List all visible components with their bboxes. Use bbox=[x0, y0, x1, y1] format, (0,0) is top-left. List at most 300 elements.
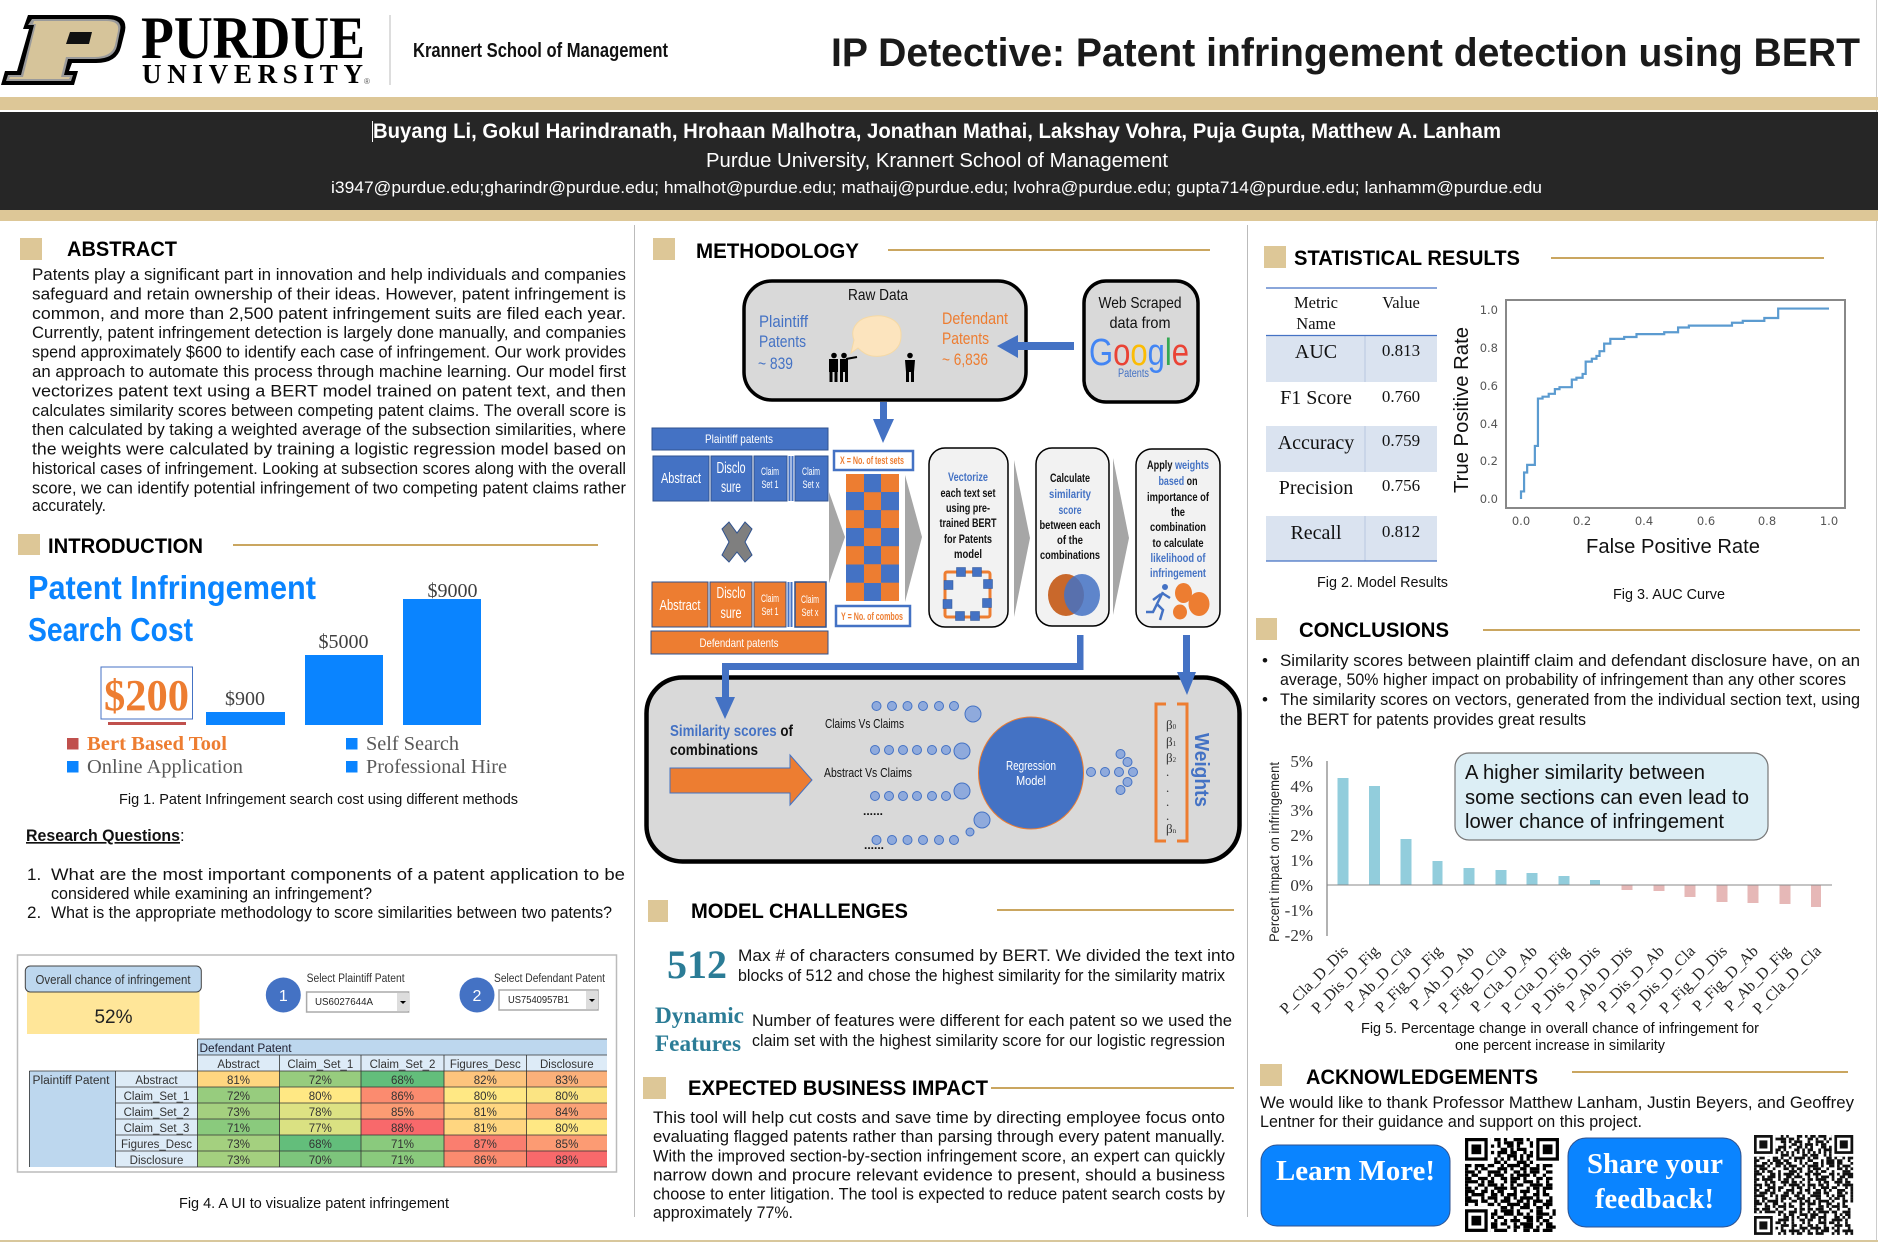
icon: QR code 1 bbox=[1465, 1138, 1559, 1232]
arrow: raw data down bbox=[873, 402, 894, 443]
heat map table: Figures_Desc bbox=[450, 1059, 521, 1071]
header: school name: Krannert School of Management bbox=[413, 40, 668, 62]
chart: patent infringement search cost: $5000 bbox=[318, 631, 368, 653]
arrow: similarity re-entry bbox=[715, 672, 735, 719]
output dots bbox=[1086, 750, 1138, 794]
button: learn more bbox=[1261, 1145, 1450, 1226]
heat map table bbox=[29, 1039, 607, 1167]
raw data box: Patents bbox=[759, 332, 806, 351]
panel: model challenges: Max # of characters consumed by BERT. We divided the text into bbox=[738, 946, 1235, 965]
arrow: similarity to combinations bbox=[715, 635, 1084, 719]
heat map table: Claim_Set_1 bbox=[124, 1091, 189, 1103]
raw data box: Defendant bbox=[942, 309, 1008, 328]
chart: percent impact bars: P_Dis_D_Ab bbox=[1595, 943, 1668, 1016]
regression model: Model bbox=[1016, 773, 1046, 788]
step: vectorize: Vectorize bbox=[948, 470, 988, 484]
caption: fig 4: Fig 4. A UI to visualize patent infringement bbox=[179, 1196, 449, 1212]
weights vector: β0 bbox=[1166, 717, 1177, 732]
chart: percent impact bars bbox=[1266, 752, 1832, 1018]
chart: percent impact bars: 3% bbox=[1290, 801, 1313, 820]
heat map table: Claim_Set_2 bbox=[370, 1059, 435, 1071]
icon: QR code 2 bbox=[1754, 1135, 1853, 1235]
heat map table: 80% bbox=[309, 1091, 332, 1103]
heat map table: 80% bbox=[555, 1123, 578, 1135]
header: Purdue logo: UNIVERSITY bbox=[142, 59, 363, 89]
panel: conclusions: average, 50% higher impact on probability of infringement than any other scores bbox=[1280, 670, 1846, 689]
chart legend: Online Application bbox=[87, 756, 243, 778]
Y label bbox=[836, 606, 910, 626]
plaintiff patents blocks: Claim bbox=[761, 466, 779, 478]
chart: percent impact bars: 0% bbox=[1290, 876, 1313, 895]
header: Purdue logo: ® bbox=[364, 77, 370, 86]
chart: percent impact bars: P_Fig_D_Cla bbox=[1436, 943, 1510, 1017]
panel: expected business impact: choose to enter litigation. The tool is expected to reduce patent search costs by bbox=[653, 1184, 1225, 1204]
defendant patents blocks: Abstract bbox=[660, 597, 701, 614]
panel: model challenges: MODEL CHALLENGES bbox=[691, 900, 908, 923]
button: share your feedback bbox=[1568, 1138, 1741, 1227]
panel: abstract: ABSTRACT bbox=[67, 238, 177, 261]
chart: percent impact bars: P_Fig_D_Dis bbox=[1657, 943, 1731, 1017]
weights vector: βn bbox=[1166, 821, 1177, 836]
heading: methodology: METHODOLOGY bbox=[696, 240, 859, 263]
chart: AUC curve: 0.0 bbox=[1480, 492, 1498, 506]
heat map table: 85% bbox=[555, 1139, 578, 1151]
heat map table: Claim_Set_1 bbox=[287, 1059, 353, 1071]
raw data box: Raw Data bbox=[848, 287, 908, 304]
icon: cross bbox=[722, 522, 752, 562]
chart: percent impact bars: P_Ab_D_Dis bbox=[1563, 943, 1636, 1016]
chart: AUC curve: 1.0 bbox=[1820, 514, 1838, 528]
heat map table: 78% bbox=[309, 1107, 332, 1119]
research questions: : bbox=[180, 827, 185, 845]
research questions: Research Questions bbox=[26, 827, 180, 845]
icon: Google wordmark: Google bbox=[1089, 332, 1189, 374]
step: similarity: combinations bbox=[1040, 548, 1100, 562]
panel: conclusions: The similarity scores on vectors, generated from the individual section text, using bbox=[1280, 690, 1860, 709]
research questions bbox=[26, 827, 625, 922]
step: similarity: Calculate bbox=[1050, 471, 1090, 485]
panel: model challenges: claim set with the highest similarity score for our logistic regression bbox=[752, 1031, 1225, 1050]
chart: percent impact bars: P_Dis_D_Cla bbox=[1624, 943, 1699, 1018]
panel: acknowledgements: We would like to thank Professor Matthew Lanham, Justin Beyers, and Geoffrey bbox=[1260, 1093, 1854, 1112]
heat map table: 88% bbox=[555, 1155, 578, 1167]
raw data box bbox=[744, 281, 1026, 400]
heat map table: 80% bbox=[555, 1091, 578, 1103]
step: weights: importance of bbox=[1147, 490, 1210, 504]
banner: authors: i3947@purdue.edu;gharindr@purdue.edu; hmalhot@purdue.edu; mathaij@purdue.edu; lvohra@purdue.edu; gupta714@purdue.edu; lanhamm@purdue.edu bbox=[331, 178, 1542, 197]
heat map table: 73% bbox=[227, 1107, 250, 1119]
heat map table: Claim_Set_2 bbox=[124, 1107, 189, 1119]
panel: introduction: INTRODUCTION bbox=[48, 535, 203, 558]
banner: authors: Purdue University, Krannert School of Management bbox=[706, 150, 1168, 172]
chart: percent impact bars: P_Cla_D_Fig bbox=[1499, 943, 1573, 1017]
caption: fig 5: one percent increase in similarity bbox=[1455, 1038, 1666, 1054]
step: weights: infringement bbox=[1150, 566, 1206, 580]
icon: speech bubble and people bbox=[829, 316, 915, 382]
neural network dots: ...... bbox=[863, 804, 883, 818]
plaintiff patents blocks: Claim bbox=[802, 466, 820, 478]
panel: conclusions: the BERT for patents provides great results bbox=[1280, 710, 1586, 729]
chart: AUC curve: 0.2 bbox=[1573, 514, 1591, 528]
research questions: What are the most important components of a patent application to be bbox=[51, 865, 625, 884]
regression panel: combinations bbox=[670, 742, 758, 759]
panel: model challenges: Dynamic bbox=[655, 1003, 744, 1028]
abstract text: score, we can identify potential infringement of two competing patent claims rather bbox=[32, 478, 626, 497]
combination checkerboard bbox=[846, 474, 899, 601]
title: IP Detective: Patent infringement detection using BERT bbox=[831, 31, 1860, 75]
overall chance box: Overall chance of infringement bbox=[36, 972, 191, 987]
table: model results: 0.813 bbox=[1382, 341, 1420, 360]
defendant patents blocks: Defendant patents bbox=[700, 636, 778, 650]
chart: AUC curve: 0.4 bbox=[1480, 417, 1498, 431]
abstract text: safeguard and retain ownership of their ideas. However, patent infringement is bbox=[32, 284, 626, 303]
step: vectorize: model bbox=[954, 547, 982, 561]
heat map table: 70% bbox=[309, 1155, 332, 1167]
table: model results: Accuracy bbox=[1278, 432, 1354, 454]
panel: model challenges: Number of features were different for each patent so we used the bbox=[752, 1011, 1232, 1030]
panel: conclusions: • bbox=[1262, 690, 1268, 709]
heat map table: 68% bbox=[309, 1139, 332, 1151]
heat map table: 84% bbox=[555, 1107, 578, 1119]
heat map table: Claim_Set_3 bbox=[124, 1123, 189, 1135]
abstract text: vectorizes patent text using a BERT model trained on patent text, and then bbox=[32, 381, 626, 400]
plaintiff patents blocks: Set x bbox=[802, 479, 820, 491]
banner: authors bbox=[0, 97, 1878, 221]
chart: percent impact bars: P_Cla_D_Cla bbox=[1750, 943, 1825, 1018]
chart: percent impact bars: -1% bbox=[1285, 901, 1313, 920]
arrows: gray chevrons bbox=[829, 458, 1129, 617]
heat map table: 71% bbox=[227, 1123, 250, 1135]
chart: percent impact bars: P_Dis_D_Fig bbox=[1309, 943, 1383, 1017]
heading: statistical results: STATISTICAL RESULTS bbox=[1294, 247, 1520, 270]
chart: percent impact bars: 4% bbox=[1290, 777, 1313, 796]
panel: model challenges: Features bbox=[655, 1031, 741, 1056]
panel: model challenges: 512 bbox=[667, 942, 727, 987]
panel: expected business impact: This tool will help cut costs and save time by directing employee focus onto bbox=[653, 1108, 1225, 1127]
web scraped box: data from bbox=[1110, 315, 1170, 332]
arrow: weights down bbox=[1177, 635, 1196, 695]
chart: percent impact bars: 1% bbox=[1290, 851, 1313, 870]
heat map table: 81% bbox=[474, 1107, 497, 1119]
raw data box: ~ 6,836 bbox=[942, 350, 988, 369]
heat map table: 73% bbox=[227, 1155, 250, 1167]
chart: patent infringement search cost: $900 bbox=[225, 688, 265, 710]
panel: conclusions bbox=[1256, 618, 1860, 729]
plaintiff selector: US6027644A bbox=[315, 996, 373, 1008]
chart: percent impact bars: -2% bbox=[1285, 926, 1313, 945]
weights vector: . bbox=[1166, 808, 1169, 823]
defendant patents blocks bbox=[651, 582, 828, 654]
chart: percent impact bars: P_Ab_D_Fig bbox=[1721, 943, 1794, 1015]
table: model results bbox=[1266, 288, 1437, 561]
caption: fig 1: Fig 1. Patent Infringement search cost using different methods bbox=[119, 792, 518, 808]
neural network dots: ...... bbox=[864, 838, 884, 852]
step: weights: combination bbox=[1150, 520, 1206, 534]
panel: acknowledgements: ACKNOWLEDGEMENTS bbox=[1306, 1066, 1538, 1089]
heat map table: 86% bbox=[391, 1091, 414, 1103]
raw data box: ~ 839 bbox=[758, 354, 793, 373]
heat map table: 72% bbox=[309, 1075, 332, 1087]
panel: expected business impact: approximately 77%. bbox=[653, 1203, 793, 1222]
heat map table: Disclosure bbox=[540, 1059, 594, 1071]
heat map table: 71% bbox=[391, 1139, 414, 1151]
heat map table: 85% bbox=[391, 1107, 414, 1119]
chart: percent impact bars: P_Dis_D_Dis bbox=[1529, 943, 1604, 1018]
panel: expected business impact: evaluating flagged patents rather than parsing through every patent manually. bbox=[653, 1127, 1225, 1146]
weights vector bbox=[1156, 704, 1212, 841]
plaintiff patents blocks: sure bbox=[721, 479, 741, 496]
heat map table: 80% bbox=[474, 1091, 497, 1103]
regression panel: Similarity scores of bbox=[670, 723, 794, 740]
chart: AUC curve bbox=[1451, 300, 1845, 558]
neural network dots bbox=[863, 702, 990, 852]
X label: X = No. of test sets bbox=[840, 455, 904, 467]
heat map table: 71% bbox=[391, 1155, 414, 1167]
panel: introduction bbox=[18, 534, 625, 922]
diagram: methodology flow bbox=[646, 281, 1240, 862]
chart: percent impact bars: P_Fig_D_Fig bbox=[1372, 943, 1446, 1016]
heading: methodology bbox=[653, 238, 1210, 263]
plaintiff selector: 1 bbox=[279, 988, 288, 1005]
X label bbox=[834, 451, 913, 470]
overall chance box: 52% bbox=[94, 1007, 133, 1028]
panel: expected business impact bbox=[643, 1077, 1234, 1222]
table: model results: 0.760 bbox=[1382, 387, 1420, 406]
weights vector: . bbox=[1166, 780, 1169, 795]
weights vector: β1 bbox=[1166, 734, 1177, 749]
defendant patents blocks: Set x bbox=[802, 607, 819, 619]
panel: abstract bbox=[20, 238, 626, 515]
banner: authors: Buyang Li, Gokul Harindranath, Hrohaan Malhotra, Jonathan Mathai, Lakshay Vohra, Puja Gupta, Matthew A. Lanham bbox=[373, 120, 1501, 143]
chart legend: Professional Hire bbox=[366, 756, 507, 778]
weights vector: Weights bbox=[1190, 733, 1212, 807]
callout: higher similarity bbox=[1455, 753, 1768, 840]
table: model results: Recall bbox=[1290, 522, 1342, 544]
step: weights: the bbox=[1171, 505, 1185, 519]
chart: percent impact bars: P_Ab_D_Cla bbox=[1342, 943, 1415, 1016]
plaintiff patents blocks: Set 1 bbox=[762, 479, 778, 491]
chart legend: Self Search bbox=[366, 733, 459, 755]
chart: percent impact bars: Percent impact on infringement bbox=[1266, 762, 1282, 942]
chart: AUC curve: False Positive Rate bbox=[1586, 536, 1760, 558]
research questions: 2. bbox=[27, 903, 41, 922]
heat map table: Plaintiff Patent bbox=[32, 1075, 110, 1087]
chart: AUC curve: True Positive Rate bbox=[1451, 327, 1473, 493]
abstract text: spend approximately $600 to identify each case of infringement. Our work provides bbox=[32, 343, 626, 362]
abstract text bbox=[32, 265, 626, 515]
chart: AUC curve: 0.6 bbox=[1697, 514, 1715, 528]
heat map table: 81% bbox=[227, 1075, 250, 1087]
heat map table: 83% bbox=[555, 1075, 578, 1087]
research questions: What is the appropriate methodology to score similarities between two patents? bbox=[51, 903, 612, 922]
weights vector: β2 bbox=[1166, 750, 1177, 765]
plaintiff patents blocks: Disclo bbox=[716, 460, 746, 477]
table: model results: 0.756 bbox=[1382, 476, 1420, 495]
step: similarity bbox=[1036, 448, 1109, 626]
raw data box: Patents bbox=[942, 329, 989, 348]
plaintiff selector bbox=[266, 973, 409, 1012]
button: share your feedback: Share your bbox=[1587, 1149, 1723, 1180]
table: model results: AUC bbox=[1295, 341, 1337, 363]
chart: patent infringement search cost: Patent Infringement bbox=[28, 569, 316, 606]
abstract text: accurately. bbox=[32, 496, 106, 515]
chart: AUC curve: 0.0 bbox=[1512, 514, 1530, 528]
heat map table: Abstract bbox=[135, 1075, 178, 1087]
panel: acknowledgements: Lentner for their guidance and support on this project. bbox=[1260, 1112, 1642, 1131]
regression panel: Claims Vs Claims bbox=[825, 716, 904, 731]
callout: higher similarity: A higher similarity between bbox=[1465, 761, 1705, 784]
weights vector: . bbox=[1166, 764, 1169, 779]
chart: AUC curve: 0.2 bbox=[1480, 454, 1498, 468]
defendant selector: 2 bbox=[473, 988, 482, 1005]
web scraped box bbox=[1084, 281, 1198, 402]
heat map table: 77% bbox=[309, 1123, 332, 1135]
abstract text: Currently, patent infringement detection is largely done manually, and companies bbox=[32, 323, 626, 342]
plaintiff patents blocks: Plaintiff patents bbox=[705, 432, 773, 446]
defendant patents blocks: Disclo bbox=[716, 585, 746, 602]
defendant patents blocks: Claim bbox=[801, 594, 819, 606]
chart legend: Bert Based Tool bbox=[87, 733, 227, 755]
chart: percent impact bars: P_Ab_D_Ab bbox=[1407, 943, 1478, 1014]
caption: fig 5 bbox=[1361, 1021, 1759, 1054]
panel: expected business impact: With the improved section-by-section infringement score, an expert can quickly bbox=[653, 1146, 1225, 1166]
regression model bbox=[978, 717, 1084, 829]
step: similarity: of the bbox=[1057, 533, 1083, 547]
abstract text: calculates similarity scores between competing patent claims. The overall score is bbox=[32, 401, 626, 420]
step: weights bbox=[1136, 449, 1220, 627]
step: similarity: score bbox=[1058, 503, 1082, 517]
regression panel: Abstract Vs Claims bbox=[824, 765, 912, 780]
caption: fig 5: Fig 5. Percentage change in overall chance of infringement for bbox=[1361, 1021, 1759, 1037]
abstract text: historical cases of infringement. Looking at subsection scores along with the overall bbox=[32, 459, 626, 478]
chart: patent infringement search cost: Search Cost bbox=[28, 611, 193, 648]
research questions: 1. bbox=[27, 865, 41, 884]
step: vectorize: for Patents bbox=[944, 532, 992, 546]
raw data box: Plaintiff bbox=[759, 312, 808, 331]
chart: percent impact bars: 2% bbox=[1290, 826, 1313, 845]
defendant patents blocks: Set 1 bbox=[762, 606, 778, 618]
panel: UI screenshot bbox=[18, 955, 616, 1172]
header: Purdue logo: PURDUE bbox=[141, 5, 365, 71]
defendant selector: US7540957B1 bbox=[508, 994, 569, 1006]
step: weights: likelihood of bbox=[1150, 551, 1206, 565]
panel: conclusions: Similarity scores between plaintiff claim and defendant disclosure have, on an bbox=[1280, 651, 1860, 670]
Y label: Y = No. of combos bbox=[841, 611, 903, 623]
plaintiff patents blocks: Abstract bbox=[661, 470, 702, 487]
step: vectorize: each text set bbox=[940, 486, 996, 500]
step: vectorize bbox=[929, 448, 1008, 627]
table: model results: Name bbox=[1296, 314, 1336, 333]
chart: AUC curve: 0.8 bbox=[1758, 514, 1776, 528]
step: similarity: similarity bbox=[1049, 487, 1091, 501]
panel: expected business impact: narrow down and procure relevant evidence to present, should a business bbox=[653, 1166, 1225, 1184]
table: model results: Precision bbox=[1279, 477, 1353, 499]
regression panel bbox=[646, 672, 1240, 862]
chart: AUC curve: 0.8 bbox=[1480, 341, 1498, 355]
chart: AUC curve: 1.0 bbox=[1480, 303, 1498, 317]
plaintiff selector: Select Plaintiff Patent bbox=[307, 973, 405, 985]
arrow: google to raw data bbox=[997, 335, 1074, 358]
research questions: considered while examining an infringement? bbox=[51, 884, 372, 903]
table: model results: Value bbox=[1382, 293, 1420, 312]
heading: statistical results bbox=[1264, 246, 1824, 270]
abstract text: then calculated by taking a weighted average of the subsection similarities, where bbox=[32, 420, 626, 439]
heat map table: 72% bbox=[227, 1091, 250, 1103]
web scraped box: Web Scraped bbox=[1098, 295, 1182, 312]
panel: model challenges bbox=[648, 900, 1235, 1056]
callout: higher similarity: lower chance of infringement bbox=[1465, 810, 1724, 833]
step: vectorize: trained BERT bbox=[940, 516, 997, 530]
panel: model challenges: blocks of 512 and chose the highest similarity for the similarity matrix bbox=[738, 966, 1225, 985]
heat map table: 86% bbox=[474, 1155, 497, 1167]
heat map table: 88% bbox=[391, 1123, 414, 1135]
heat map table: Figures_Desc bbox=[121, 1139, 192, 1151]
table: model results: 0.812 bbox=[1382, 522, 1420, 541]
heat map table: Disclosure bbox=[130, 1155, 183, 1167]
abstract text: common, and more than 2,500 patent infringement suits are filed each year. bbox=[32, 304, 626, 323]
caption: fig 2: Fig 2. Model Results bbox=[1317, 575, 1448, 591]
step: similarity: between each bbox=[1040, 518, 1100, 532]
header: Purdue logo bbox=[1, 5, 370, 89]
chart: AUC curve: 0.4 bbox=[1635, 514, 1653, 528]
defendant patents blocks: sure bbox=[720, 605, 742, 622]
panel: expected business impact: EXPECTED BUSINESS IMPACT bbox=[688, 1077, 988, 1100]
heat map table: 68% bbox=[391, 1075, 414, 1087]
plaintiff patents blocks bbox=[652, 428, 828, 501]
step: weights: based on bbox=[1158, 474, 1198, 488]
chart: patent infringement search cost: $9000 bbox=[428, 580, 478, 602]
abstract text: Patents play a significant part in innovation and help individuals and companies bbox=[32, 265, 626, 284]
chart: patent infringement search cost bbox=[28, 569, 507, 778]
table: model results: 0.759 bbox=[1382, 431, 1420, 450]
arrow: orange bbox=[670, 755, 812, 805]
icon: runner and circles bbox=[1146, 583, 1210, 620]
chart: percent impact bars: P_Cla_D_Dis bbox=[1277, 943, 1352, 1018]
panel: conclusions: CONCLUSIONS bbox=[1299, 619, 1449, 642]
chart: percent impact bars: P_Fig_D_Ab bbox=[1689, 943, 1762, 1015]
web scraped box: Patents bbox=[1118, 368, 1149, 380]
step: weights: to calculate bbox=[1152, 536, 1204, 550]
defendant selector bbox=[460, 973, 606, 1012]
chart: patent infringement search cost: $200 bbox=[104, 671, 189, 720]
table: model results: Metric bbox=[1294, 293, 1338, 312]
regression model: Regression bbox=[1006, 758, 1056, 773]
callout: higher similarity: some sections can even lead to bbox=[1465, 786, 1749, 809]
panel: conclusions: • bbox=[1262, 651, 1268, 670]
abstract text: the weights were calculated by training a logistic regression model based on bbox=[32, 440, 626, 459]
step: vectorize: using pre- bbox=[946, 501, 990, 515]
abstract text: an approach to automate this process through machine learning. Our model first bbox=[32, 362, 626, 381]
table: model results: F1 Score bbox=[1280, 387, 1352, 409]
weights vector: . bbox=[1166, 794, 1169, 809]
overall chance box bbox=[25, 966, 201, 1034]
button: learn more: Learn More! bbox=[1276, 1156, 1435, 1187]
heat map table: 81% bbox=[474, 1123, 497, 1135]
heat map table: 82% bbox=[474, 1075, 497, 1087]
chart: percent impact bars: P_Cla_D_Ab bbox=[1468, 943, 1541, 1016]
caption: fig 3: Fig 3. AUC Curve bbox=[1613, 587, 1725, 603]
heat map table: Abstract bbox=[217, 1059, 260, 1071]
heat map table: 87% bbox=[474, 1139, 497, 1151]
panel: acknowledgements bbox=[1260, 1064, 1854, 1131]
defendant selector: Select Defendant Patent bbox=[494, 973, 606, 985]
button: share your feedback: feedback! bbox=[1595, 1184, 1714, 1215]
defendant patents blocks: Claim bbox=[761, 593, 779, 605]
step: weights: Apply weights bbox=[1147, 458, 1209, 472]
heat map table: Defendant Patent bbox=[200, 1041, 292, 1055]
heat map table: 73% bbox=[227, 1139, 250, 1151]
chart: AUC curve: 0.6 bbox=[1480, 379, 1498, 393]
